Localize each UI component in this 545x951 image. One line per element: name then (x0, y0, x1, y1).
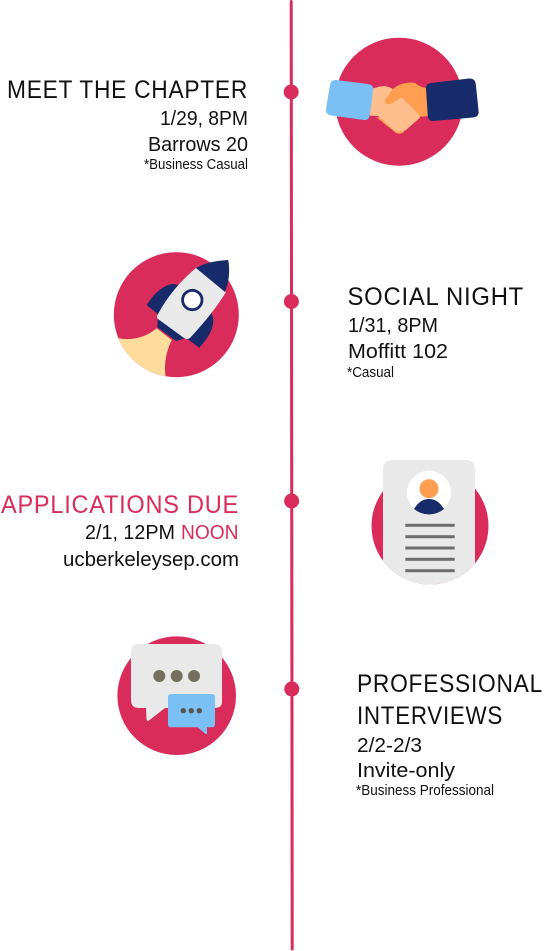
dress code: business casual: *Business Casual (144, 157, 248, 173)
timeline dot: meet the chapter (284, 84, 299, 100)
text block: professional interviews (356, 670, 543, 799)
timeline dot: professional interviews (284, 682, 299, 696)
location: Barrows 20: Barrows 20 (148, 134, 248, 156)
icon: handshake (326, 38, 479, 166)
date: 1/29: 1/29, 8PM (160, 108, 248, 130)
date: 1/31: 1/31, 8PM (348, 315, 438, 337)
dress code: casual: *Casual (347, 365, 394, 381)
heading: applications due: APPLICATIONS DUE (1, 491, 239, 519)
heading: meet the chapter: MEET THE CHAPTER (7, 76, 248, 104)
invite-only note: Invite-only (357, 760, 455, 782)
date: 2/1 12PM: 2/1, 12PM (85, 522, 175, 544)
text block: social night (347, 283, 524, 381)
date: 2/2-2/3: 2/2-2/3 (357, 735, 422, 757)
icon: chat bubbles (117, 636, 236, 755)
dress code: business professional: *Business Professional (356, 783, 494, 799)
heading: interviews: INTERVIEWS (357, 702, 503, 730)
timeline line (291, 2, 292, 949)
heading: social night: SOCIAL NIGHT (348, 283, 524, 311)
website: ucberkeleysep.com (63, 549, 239, 571)
timeline dot: social night (284, 294, 299, 309)
text block: meet the chapter (7, 76, 248, 173)
timeline dot: applications due (284, 494, 299, 508)
icon: rocket (110, 252, 239, 380)
icon: resume (372, 460, 488, 585)
location: Moffitt 102: Moffitt 102 (348, 341, 448, 363)
text block: applications due (1, 491, 239, 571)
noon label: NOON (181, 522, 238, 544)
